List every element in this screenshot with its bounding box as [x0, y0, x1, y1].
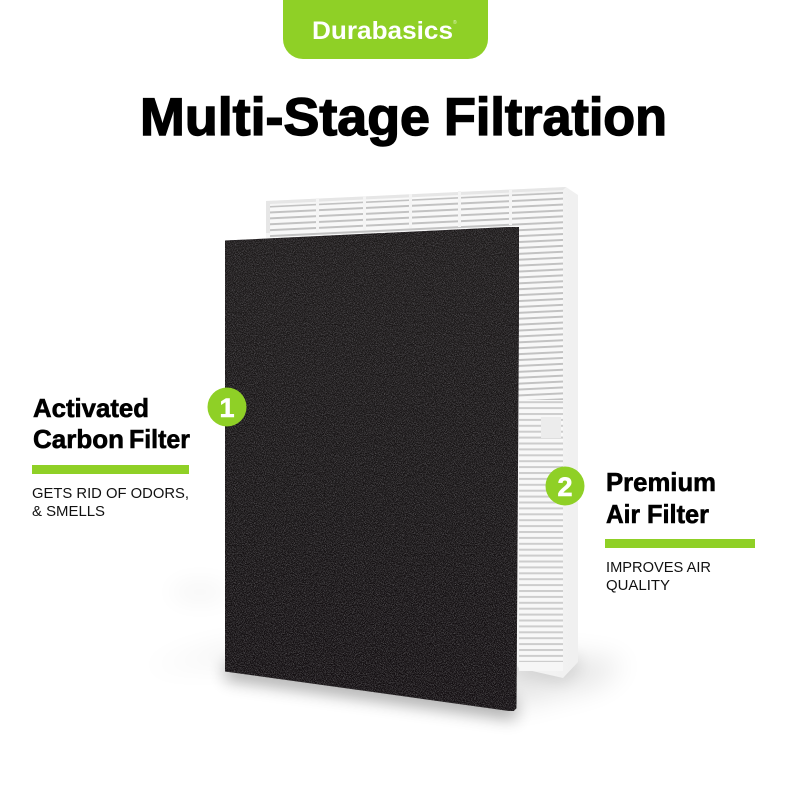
air filter: white pleated panel: [266, 187, 578, 678]
right heading: Premium: [606, 467, 716, 497]
title: Multi-Stage: [140, 88, 430, 147]
title: Filtration: [444, 88, 667, 147]
brand tab: [283, 0, 488, 59]
right heading: [606, 467, 716, 529]
left heading: Filter: [129, 424, 190, 454]
number badge 2: 2: [557, 472, 573, 502]
left description: & SMELLS: [32, 503, 105, 520]
right green bar: [605, 539, 755, 548]
right heading: Air: [606, 499, 640, 529]
right description: [606, 559, 711, 594]
brand tab: Durabasics: [312, 17, 453, 45]
left heading: Carbon: [33, 424, 124, 454]
adhesive strips: [316, 189, 512, 232]
left description: GETS RID OF ODORS,: [32, 485, 189, 502]
floor shadows: [140, 582, 625, 720]
activated carbon foam panel: [225, 227, 519, 711]
right description: QUALITY: [606, 577, 670, 594]
left heading: [33, 393, 190, 454]
number badge 1: [208, 388, 246, 426]
left heading: Activated: [33, 393, 149, 423]
right description: IMPROVES AIR: [606, 559, 711, 576]
right heading: Filter: [647, 499, 709, 529]
left green bar: [32, 465, 189, 474]
pleats: [270, 192, 563, 400]
right callout: premium air filter: [605, 467, 755, 594]
number badge 2: [546, 466, 584, 506]
left description: [32, 485, 189, 520]
brand tab: ®: [453, 19, 457, 26]
left callout: activated carbon filter: [32, 393, 190, 520]
title: [140, 88, 667, 147]
number badge 1: 1: [219, 393, 235, 423]
